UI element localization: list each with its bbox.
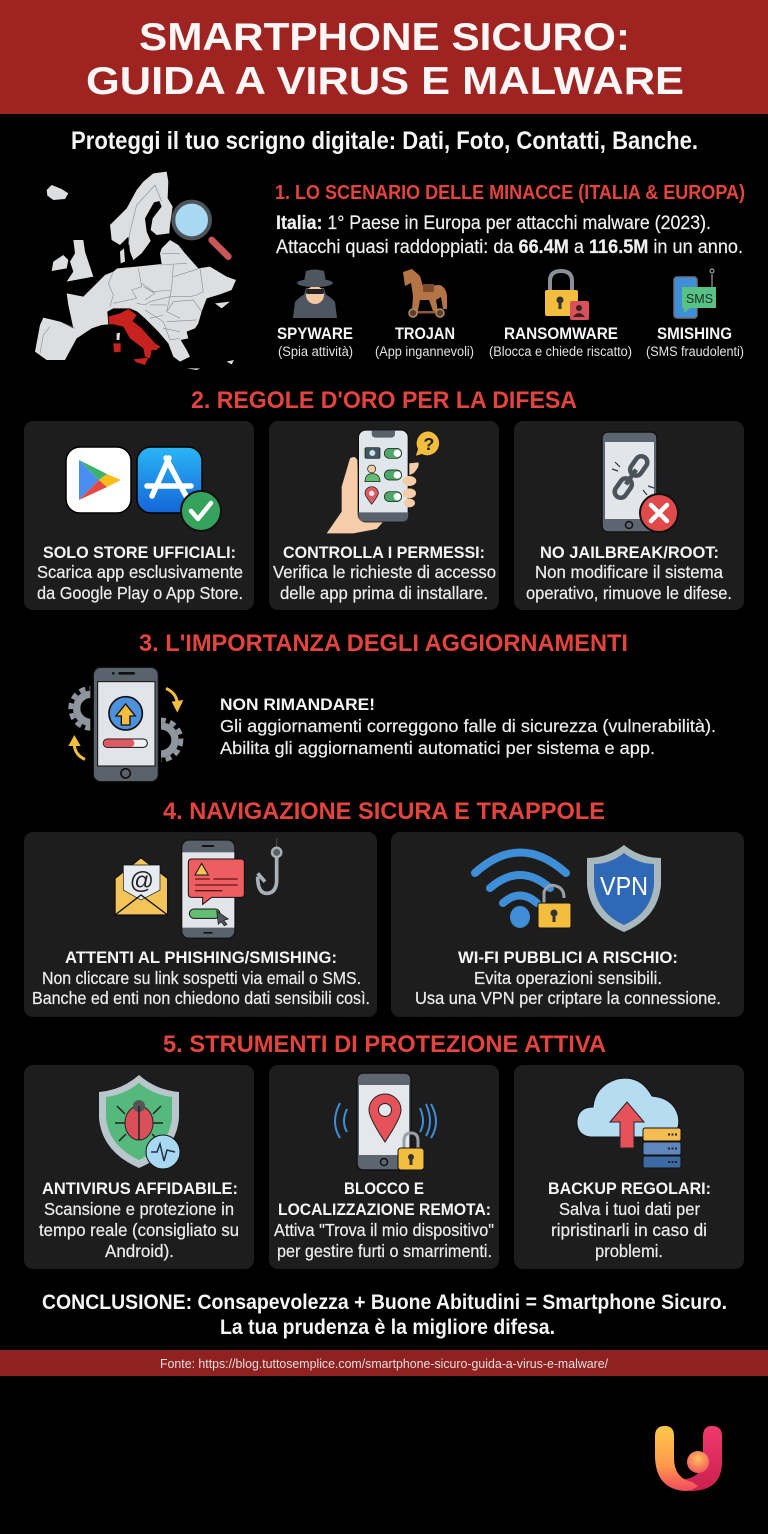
text: ANTIVIRUS AFFIDABILE: xyxy=(42,1180,238,1198)
text: Verifica le richieste di accesso xyxy=(273,562,496,582)
icon: App Store tile xyxy=(137,447,202,513)
update text: NON RIMANDARE! xyxy=(220,696,375,714)
section 2 heading: 2. REGOLE D'ORO PER LA DIFESA xyxy=(191,387,577,414)
icon: phone with pin and lock xyxy=(335,1073,436,1170)
text: Scarica app esclusivamente xyxy=(37,562,243,582)
icon: spy xyxy=(293,270,337,318)
text: NO JAILBREAK/ROOT: xyxy=(540,544,719,562)
icon: VPN shield: VPN xyxy=(600,871,648,901)
source bar xyxy=(0,1350,768,1376)
text: da Google Play o App Store. xyxy=(37,583,243,603)
icon: question bubble xyxy=(415,431,439,456)
Scandinavia xyxy=(110,172,173,260)
text: Attiva "Trova il mio dispositivo" xyxy=(274,1220,494,1240)
icon: Google Play tile xyxy=(66,447,131,513)
text xyxy=(274,1180,494,1261)
title: GUIDA A VIRUS E MALWARE xyxy=(86,60,684,103)
text: problemi. xyxy=(595,1241,663,1261)
icon: green check xyxy=(181,491,221,531)
country borders xyxy=(40,185,203,353)
text: LOCALIZZAZIONE REMOTA: xyxy=(278,1201,491,1219)
European mainland xyxy=(35,240,236,362)
threat: ransomware: (Blocca e chiede riscatto) xyxy=(489,344,632,359)
text xyxy=(548,1180,711,1261)
text: Non modificare il sistema xyxy=(535,562,723,582)
text: Evita operazioni sensibili. xyxy=(474,968,662,988)
text: CONTROLLA I PERMESSI: xyxy=(283,544,485,562)
text xyxy=(273,544,496,603)
section 1 statistics text: Attacchi quasi raddoppiati: da 66.4M a 116.5M in un anno. xyxy=(276,237,743,258)
threat: trojan xyxy=(375,269,474,359)
threat: ransomware: RANSOMWARE xyxy=(504,325,618,343)
section 3 heading: 3. L'IMPORTANZA DEGLI AGGIORNAMENTI xyxy=(139,630,628,657)
threat: trojan: (App ingannevoli) xyxy=(375,344,474,359)
icon: SMS phone: SMS xyxy=(686,291,713,306)
text: Non cliccare su link sospetti via email o SMS. xyxy=(42,968,361,988)
text: operativo, rimuove le difese. xyxy=(526,583,732,603)
threat: smishing xyxy=(646,269,744,359)
Great Britain, Ireland and Denmark xyxy=(52,240,125,282)
text: Salva i tuoi dati per xyxy=(559,1199,700,1219)
icon: VPN shield xyxy=(587,845,661,932)
text: per gestire furti o smarrimenti. xyxy=(277,1241,492,1261)
update text: Gli aggiornamenti correggono falle di sicurezza (vulnerabilità). xyxy=(220,716,716,736)
text: Android). xyxy=(105,1241,174,1261)
threat: spyware xyxy=(277,270,353,359)
map of Europe with Italy highlighted xyxy=(35,172,236,370)
icon: hand holding phone xyxy=(327,430,419,533)
threat: smishing: SMISHING xyxy=(657,325,732,343)
icon: trojan horse xyxy=(403,269,447,317)
Iceland xyxy=(47,185,68,200)
threat: spyware: SPYWARE xyxy=(277,325,353,343)
title xyxy=(86,16,684,103)
magnifying glass xyxy=(173,202,228,257)
Crimea and islands xyxy=(117,302,234,370)
icon: phone with alert xyxy=(182,840,244,938)
text: tempo reale (consigliato su xyxy=(39,1220,239,1240)
panel: permissions xyxy=(269,421,499,610)
icon: cloud with server xyxy=(577,1078,681,1168)
section 4 heading: 4. NAVIGAZIONE SICURA E TRAPPOLE xyxy=(163,798,605,825)
threat: smishing: (SMS fraudolenti) xyxy=(646,344,744,359)
text: ATTENTI AL PHISHING/SMISHING: xyxy=(65,949,337,967)
panel: remote lock xyxy=(269,1065,499,1269)
text: ripristinarli in caso di xyxy=(551,1220,707,1240)
section 5 heading: 5. STRUMENTI DI PROTEZIONE ATTIVA xyxy=(163,1031,606,1058)
Italy xyxy=(108,309,161,365)
text xyxy=(39,1180,239,1261)
panel: phishing xyxy=(24,832,377,1017)
text xyxy=(526,544,732,603)
update text xyxy=(220,696,716,758)
text: SOLO STORE UFFICIALI: xyxy=(43,544,236,562)
threat: spyware: (Spia attività) xyxy=(278,344,353,359)
text: WI-FI PUBBLICI A RISCHIO: xyxy=(458,949,678,967)
icon: envelope: @ xyxy=(130,867,154,894)
icon: fishing hook xyxy=(258,838,281,893)
icon: padlock xyxy=(545,271,589,320)
icon: envelope xyxy=(115,858,168,915)
update text: Abilita gli aggiornamenti automatici per sistema e app. xyxy=(220,738,655,758)
source bar: Fonte: https://blog.tuttosemplice.com/smartphone-sicuro-guida-a-virus-e-malware/ xyxy=(160,1357,609,1371)
panel: public wifi xyxy=(391,832,744,1017)
icon: phone update with gears xyxy=(68,667,183,782)
icon: shield with bug xyxy=(99,1075,180,1169)
threat: trojan: TROJAN xyxy=(395,325,455,343)
icon: wifi with open lock xyxy=(475,852,571,928)
threat: ransomware xyxy=(489,271,632,359)
text xyxy=(32,949,370,1008)
section 1 statistics text: Italia: 1° Paese in Europa per attacchi malware (2023). xyxy=(276,213,711,234)
text: BLOCCO E xyxy=(344,1180,424,1198)
panel: antivirus xyxy=(24,1065,254,1269)
conclusion xyxy=(42,1290,727,1339)
panel: no jailbreak xyxy=(514,421,744,610)
header banner xyxy=(0,0,768,114)
panel: official stores xyxy=(24,421,254,610)
icon: question bubble: ? xyxy=(423,434,434,454)
text: BACKUP REGOLARI: xyxy=(548,1180,711,1198)
text: Usa una VPN per criptare la connessione. xyxy=(415,988,721,1008)
text: delle app prima di installare. xyxy=(280,583,488,603)
icon: red cross xyxy=(640,494,678,532)
text: Scansione e protezione in xyxy=(44,1199,234,1219)
section 1 statistics text xyxy=(276,213,743,258)
text xyxy=(415,949,721,1008)
text xyxy=(37,544,243,603)
icon: phone with broken chain xyxy=(602,432,657,532)
panel: backup xyxy=(514,1065,744,1269)
conclusion: La tua prudenza è la migliore difesa. xyxy=(220,1315,555,1339)
logo xyxy=(655,1426,722,1491)
subtitle: Proteggi il tuo scrigno digitale: Dati, Foto, Contatti, Banche. xyxy=(71,127,698,155)
text: Banche ed enti non chiedono dati sensibili così. xyxy=(32,988,370,1008)
title: SMARTPHONE SICURO: xyxy=(139,16,630,59)
